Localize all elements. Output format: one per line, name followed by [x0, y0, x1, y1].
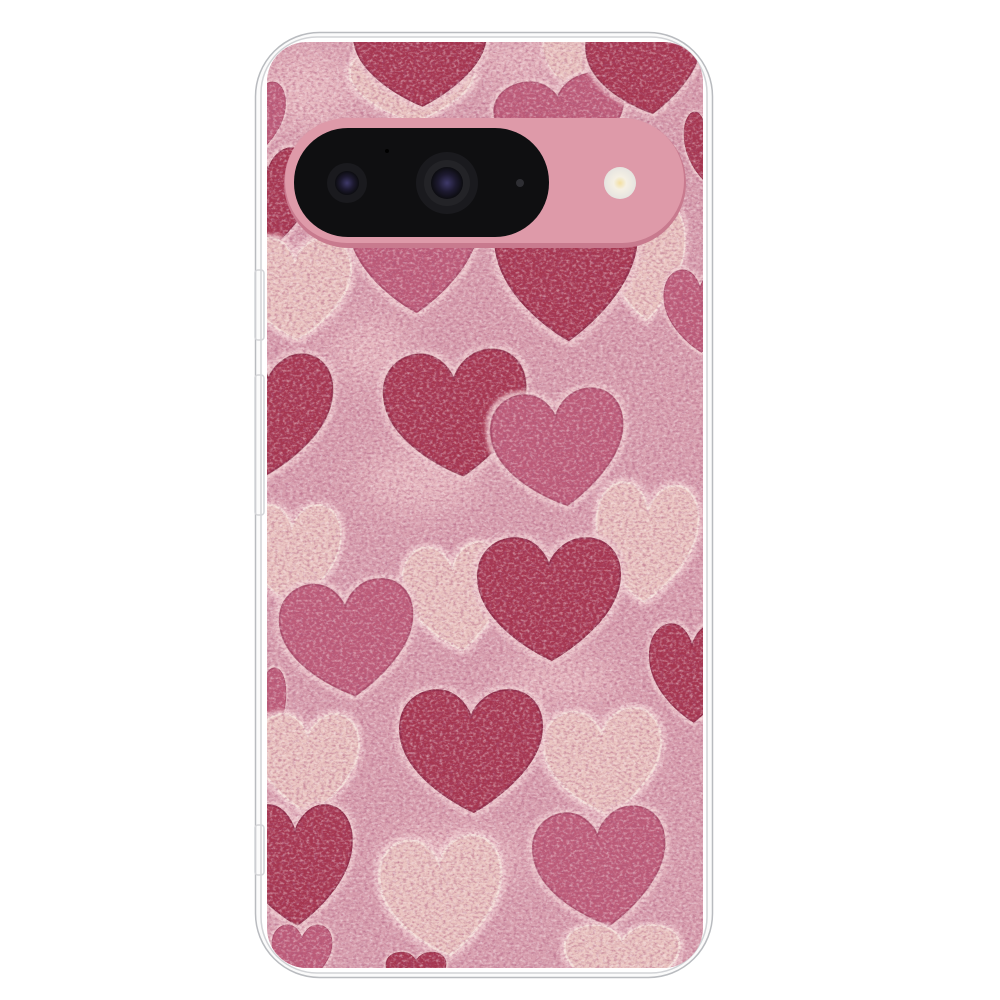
heart: left dark bottom: [267, 800, 358, 930]
paint texture overlay: highlights: [267, 42, 703, 968]
heart: right light: [591, 480, 701, 605]
heart: centre mid: [487, 385, 631, 512]
heart: bottom light right: [558, 920, 686, 968]
heart: centre light: [397, 536, 492, 656]
heart: light left: [267, 232, 356, 346]
camera window: [294, 128, 549, 237]
heart: left mid lower: [277, 576, 419, 701]
heart: right edge dark: [682, 109, 703, 184]
heart: centre dark lower: [478, 538, 620, 660]
heart: right edge mid: [662, 266, 703, 356]
heart: left light lower: [257, 714, 359, 814]
heart: bottom left mid: [269, 922, 335, 968]
heart: light right: [620, 208, 689, 326]
camera bar: [284, 118, 686, 248]
heart: right light lower: [541, 706, 666, 820]
icon: microphone dot: [516, 179, 524, 187]
background: soft light paint patches: [265, 40, 620, 890]
phone case: transparent bumper: [256, 32, 712, 978]
hearts pattern: [267, 42, 703, 968]
side buttons on case: [255, 270, 264, 875]
icon: left lens: [327, 163, 367, 203]
heart: top centre mid: [488, 71, 629, 118]
icon: main lens: [416, 152, 478, 214]
heart: top right dark: [582, 42, 700, 118]
icon: sensor dot: [385, 149, 389, 153]
heart: left edge mid lower: [267, 664, 288, 718]
heart: centre dark: [381, 347, 531, 481]
heart: left edge mid: [267, 79, 288, 149]
heart: mid under camera: [350, 248, 480, 318]
heart: left dark under camera: [267, 143, 300, 240]
heart: dark under camera: [488, 245, 641, 348]
heart: left light: [267, 500, 346, 602]
paint texture overlay: shadows: [267, 42, 703, 968]
heart: right edge dark lower: [646, 619, 703, 726]
heart: centre dark bottom: [400, 690, 542, 812]
heart: top light: [350, 50, 474, 122]
heart: bottom centre dark: [383, 950, 449, 968]
heart: left edge dark: [267, 349, 339, 481]
heart: centre light bottom: [376, 833, 508, 961]
heart: top small light: [541, 42, 588, 84]
heart: top dark: [348, 42, 491, 109]
background: pink painted texture: [267, 42, 703, 968]
printed back panel with hearts: [267, 42, 703, 968]
heart: right mid bottom: [529, 803, 673, 932]
icon: flash: [604, 167, 636, 199]
